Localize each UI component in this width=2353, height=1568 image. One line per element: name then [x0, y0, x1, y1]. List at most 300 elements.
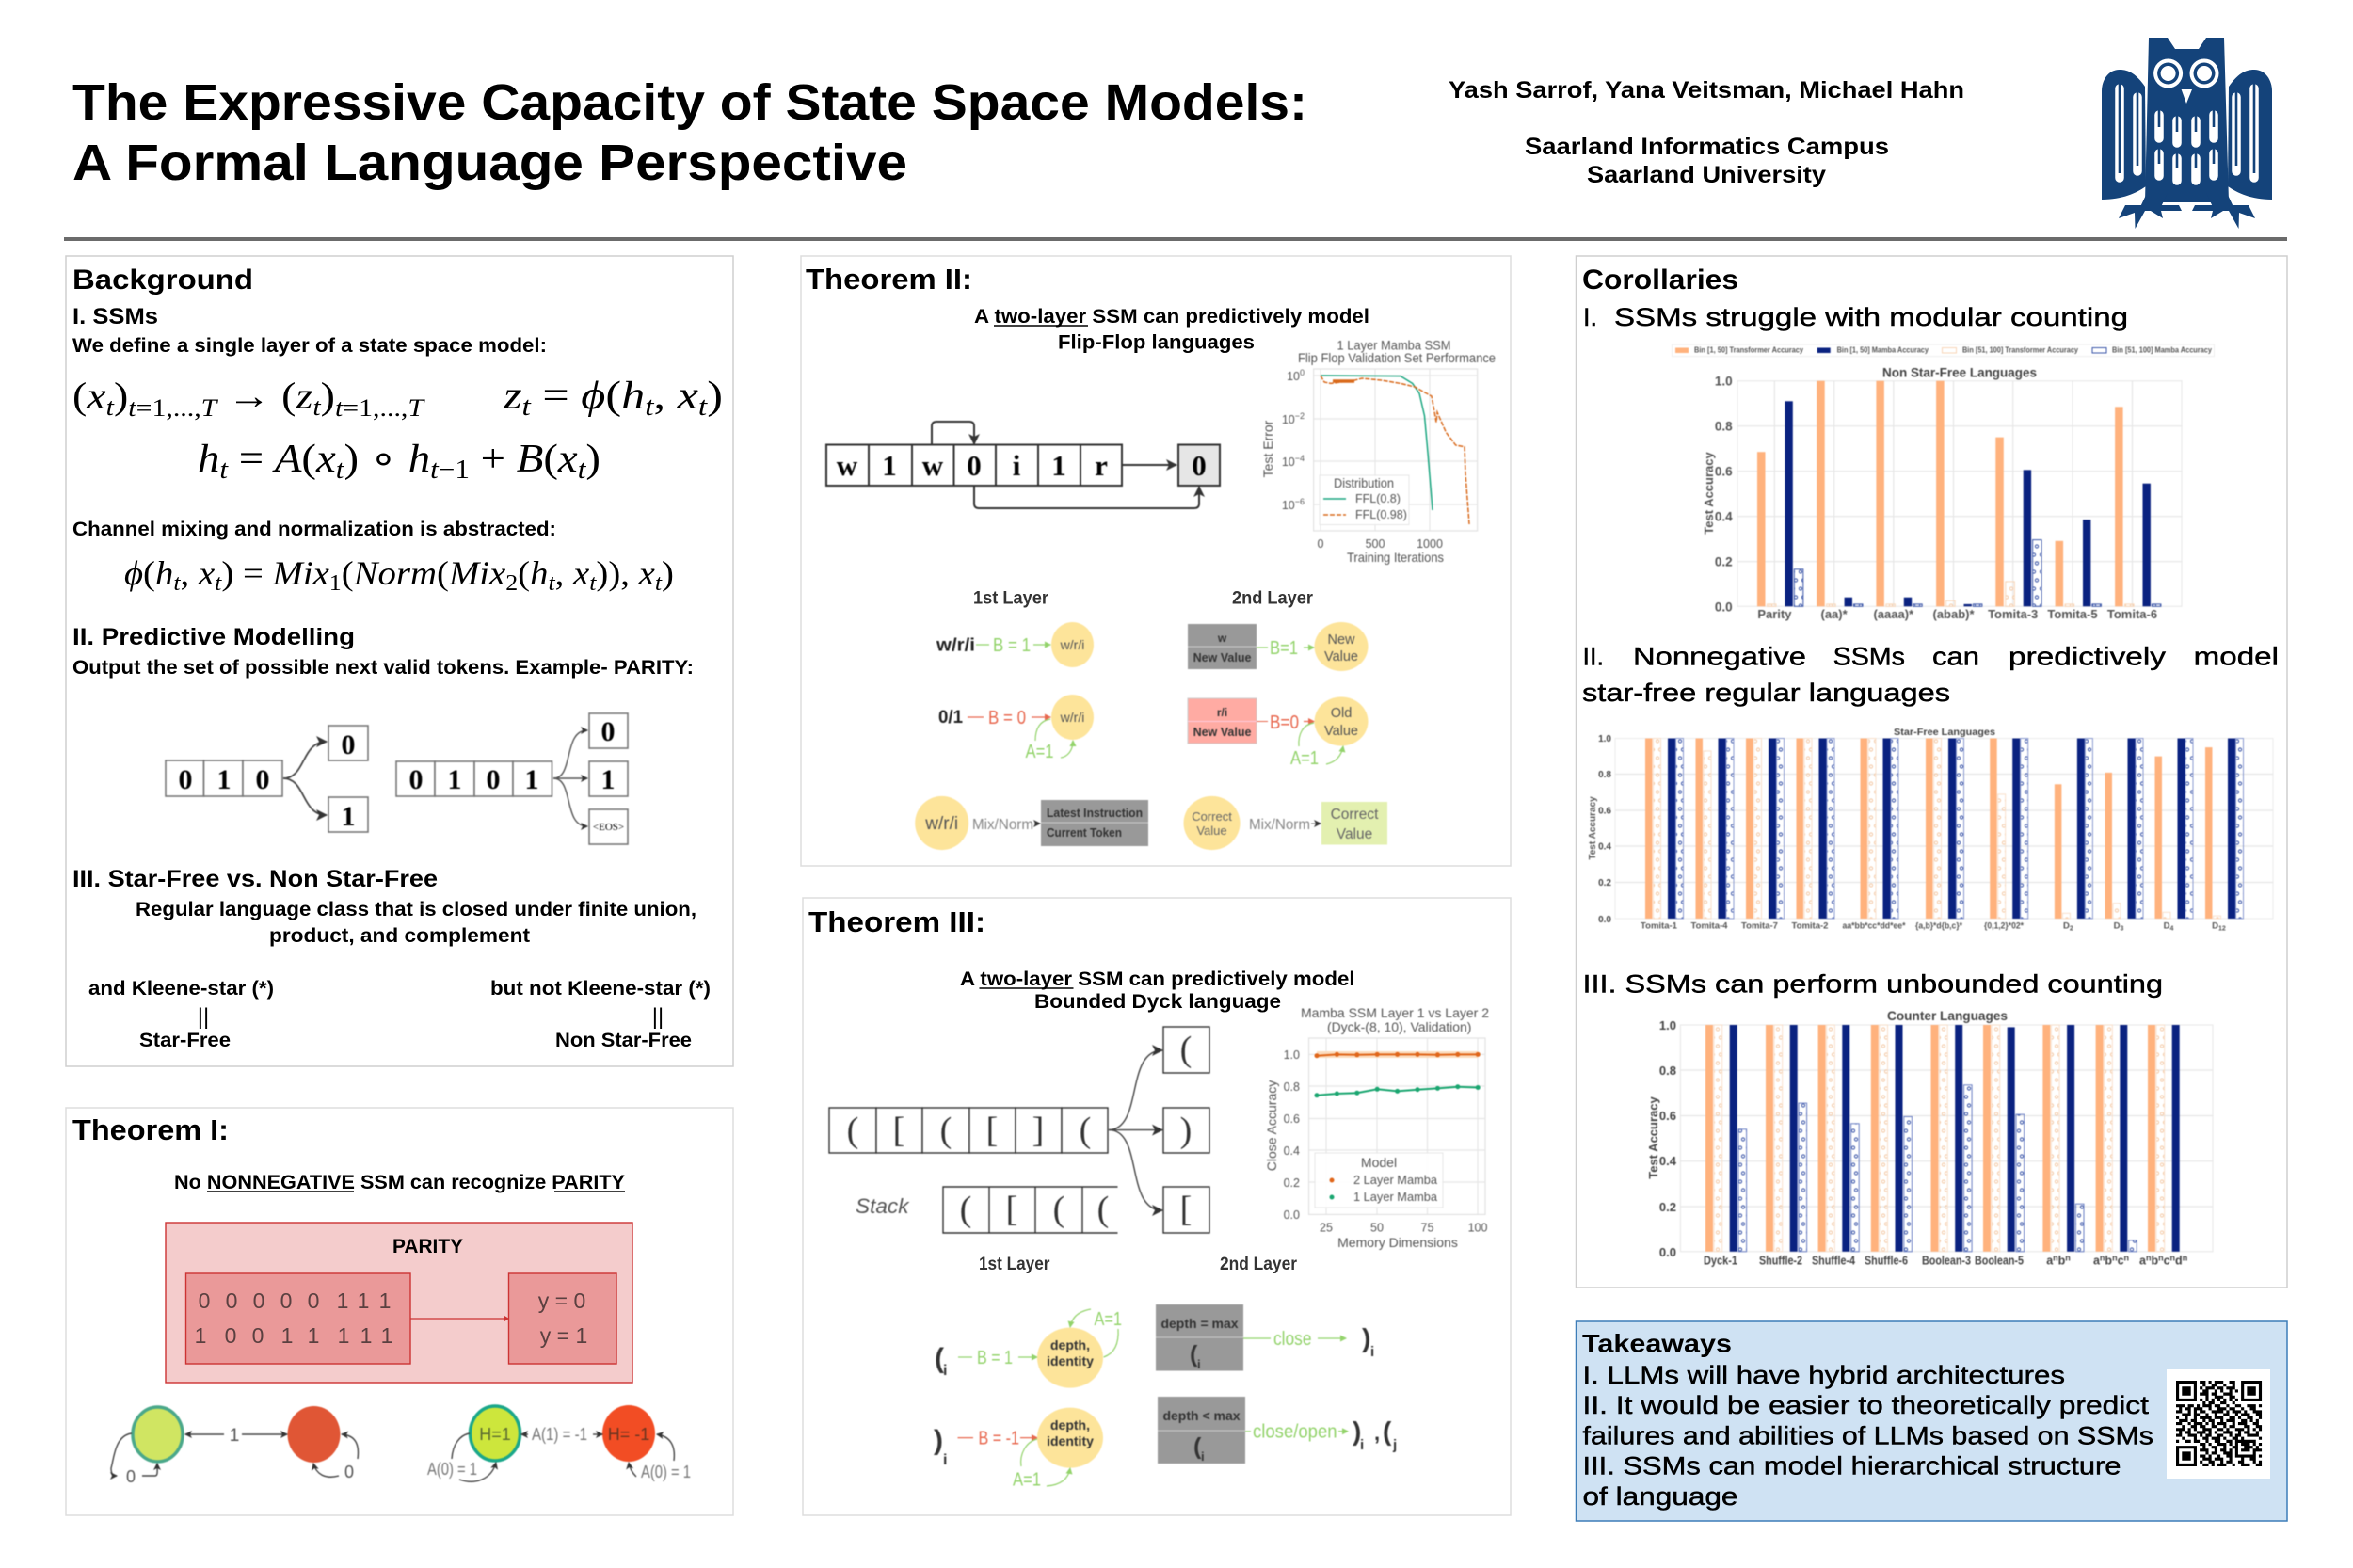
diagram: first layer hold path: w/r/i [1060, 710, 1084, 725]
equation: sequence mapping: t [128, 394, 136, 422]
text: theorem III statement [960, 968, 1355, 1013]
diagram: second layer old value: Old [1331, 706, 1352, 721]
diagram: first layer write path: B = 1 [993, 635, 1031, 656]
authors and affiliation [1449, 77, 1964, 188]
diagram: flip-flop sequence: 0 [1192, 449, 1207, 482]
chart: mamba layer 1 vs layer 2: 0.6 [1284, 1112, 1300, 1126]
text: theorem II statement: Flip-Flop languages [1058, 331, 1255, 354]
equation: sequence mapping: z [295, 375, 313, 417]
equation: phi: ) = [221, 554, 273, 592]
chart: flip flop validation performance: Flip Flop Validation Set Performance [1298, 351, 1496, 365]
equation: output: ϕ(h [581, 375, 641, 418]
heading: theorem II: Theorem II: [806, 263, 972, 296]
heading: 1st layer: 1st Layer [973, 589, 1049, 609]
chart: mamba layer 1 vs layer 2: Model [1361, 1155, 1397, 1170]
icon: QR code [2167, 1369, 2270, 1479]
diagram: dyck sequence and next tokens: ) [1180, 1111, 1192, 1150]
diagram: parity box: 1 [338, 1323, 349, 1348]
diagram: parity prefix 010: 1 [216, 764, 232, 795]
diagram: flip-flop sequence: w [922, 449, 944, 482]
text: non star-free definition: || [652, 1004, 664, 1030]
diagram: dyck sequence and next tokens: [ [893, 1111, 904, 1150]
chart: mamba layer 1 vs layer 2 [1264, 1005, 1489, 1250]
equation: hidden state: ) [585, 438, 600, 481]
bar chart: non star-free languages: Tomita-5 [2047, 607, 2098, 621]
equation: hidden state: t [578, 456, 587, 485]
equation: phi: x [198, 554, 215, 592]
diagram: second layer output: Correct [1192, 809, 1232, 824]
chart: mamba layer 1 vs layer 2: 0.4 [1284, 1144, 1300, 1158]
bar chart: non star-free languages: (abab)* [1932, 607, 1975, 621]
diagram: dyck sequence and next tokens [829, 1027, 1209, 1233]
bar chart: non star-free languages: Tomita-6 [2107, 607, 2157, 621]
diagram: parity prefix 010: 0 [256, 764, 269, 795]
text: theorem II statement: A two-layer SSM can predictively model [974, 305, 1369, 328]
diagram: second layer new value: New [1327, 632, 1355, 648]
bar chart: non star-free languages: Non Star-Free Languages [1882, 365, 2037, 380]
bar chart: star-free languages: Test Accuracy [1588, 796, 1598, 860]
heading: theorem I: Theorem I: [72, 1113, 229, 1146]
chart: mamba layer 1 vs layer 2: 0.2 [1284, 1176, 1300, 1190]
bar chart: star-free languages: 0.6 [1598, 806, 1611, 817]
bar chart: counter languages: Boolean-5 [1975, 1254, 2024, 1267]
equation: output: ) [707, 375, 723, 418]
equation: phi: t [215, 571, 223, 596]
diagram: dyck sequence and next tokens: ] [1032, 1111, 1044, 1150]
diagram: dyck sequence and next tokens: ( [847, 1111, 858, 1150]
chart: mamba layer 1 vs layer 2: Memory Dimensions [1337, 1235, 1458, 1250]
diagram: parity prefix 0101: 0 [408, 764, 424, 795]
text: takeaway list: of language [1583, 1482, 1737, 1511]
diagram: depth below max: ( [1383, 1416, 1392, 1446]
chart: mamba layer 1 vs layer 2: 2 Layer Mamba [1353, 1173, 1438, 1187]
chart: flip flop validation performance: 10 [1282, 456, 1295, 469]
diagram: stack: [ [1006, 1190, 1017, 1229]
heading: 1st layer: 1st Layer [979, 1255, 1050, 1274]
bar chart: counter languages: Shuffle-2 [1759, 1254, 1802, 1267]
equation: hidden state: A(x [275, 438, 334, 481]
diagram: flip-flop sequence: 1 [882, 449, 897, 482]
bar chart: counter languages: b [2151, 1254, 2158, 1267]
equation: phi: )), [596, 554, 639, 592]
diagram: second layer output: Value [1196, 824, 1227, 838]
diagram: stack: ( [960, 1190, 971, 1229]
diagram: parity prefix 010: 0 [179, 764, 192, 795]
diagram: first layer hold path: B = 0 [988, 708, 1026, 728]
title [72, 74, 1307, 191]
bar chart: counter languages: n [2146, 1254, 2151, 1263]
bar chart: star-free languages: 12 [2218, 926, 2226, 932]
diagram: depth below max: ( [1193, 1433, 1202, 1460]
diagram: open bracket first layer [935, 1309, 1122, 1388]
diagram: parity box: 0 [253, 1288, 264, 1313]
bar chart: counter languages: 0.2 [1659, 1200, 1676, 1214]
equation: output: t [698, 392, 709, 422]
text: theorem I statement: No NONNEGATIVE SSM can recognize PARITY [174, 1172, 625, 1193]
diagram: parity box: 1 [379, 1288, 391, 1313]
panel: takeaways [1576, 1321, 2287, 1521]
chart legend: bins: Bin [1, 50] Transformer Accuracy [1694, 344, 1803, 354]
diagram: depth equals max: close [1273, 1329, 1312, 1350]
equation: phi: Norm(Mix [354, 554, 502, 592]
equation: sequence mapping: =1,..., T [343, 394, 422, 422]
bar chart: star-free languages: 4 [2169, 926, 2173, 932]
diagram: close bracket first layer: i [943, 1452, 947, 1468]
chart legend: bins: Bin [1, 50] Mamba Accuracy [1837, 344, 1929, 354]
equation: hidden state: h [408, 438, 430, 481]
diagram: second layer output: Mix/Norm [1249, 817, 1310, 833]
subheading: star-free regular languages: SSMs [1833, 643, 1905, 671]
text: regular language class: product, and complement [269, 925, 530, 947]
bar chart: counter languages: Shuffle-6 [1865, 1254, 1908, 1267]
subheading: star-free regular languages [1582, 643, 2279, 707]
panel: corollaries [1576, 256, 2287, 1288]
chart: flip flop validation performance: FFL(0.8) [1355, 492, 1401, 505]
equation: sequence mapping: t [312, 393, 322, 421]
diagram: two-state parity automaton: 0 [126, 1467, 136, 1486]
bar chart: star-free languages: D [2063, 920, 2070, 932]
diagram: depth equals max: ) [1362, 1323, 1370, 1352]
equation: output: = [531, 375, 581, 418]
panel: theorem III [803, 898, 1511, 1515]
diagram: depth equals max: i [1197, 1357, 1201, 1371]
bar chart: counter languages: Counter Languages [1887, 1009, 2008, 1023]
chart: flip flop validation performance: 500 [1366, 537, 1385, 551]
diagram: stack: ( [1097, 1190, 1109, 1229]
diagram: nonpositive SSM automaton: A(0) = 1 [641, 1463, 691, 1481]
bar chart: star-free languages: 0.2 [1598, 878, 1611, 888]
diagram: close bracket first layer: identity [1047, 1433, 1094, 1448]
bar chart: counter languages: a [2046, 1254, 2053, 1267]
diagram: flip-flop sequence: w [837, 449, 858, 482]
text: takeaway list: II. It would be easier to theoretically predict [1583, 1391, 2150, 1419]
bar chart: counter languages: c [2118, 1254, 2124, 1267]
text: star-free definition: and Kleene-star (*) [88, 978, 274, 1000]
equation: hidden state: = [228, 438, 275, 481]
subheading: SSMs: I. SSMs [72, 304, 158, 329]
diagram: stack: Stack [856, 1194, 910, 1218]
equation: phi: , [181, 554, 199, 592]
diagram: parity box: 1 [281, 1323, 293, 1348]
diagram: parity prefix 010: 0 [341, 729, 356, 760]
text: theorem III statement: Bounded Dyck language [1034, 990, 1281, 1013]
diagram: flip-flop sequence [826, 422, 1220, 508]
diagram: first layer output [915, 796, 1148, 850]
subheading: predictive modelling: II. Predictive Modelling [72, 624, 355, 650]
chart: flip flop validation performance: −6 [1295, 497, 1305, 506]
authors and affiliation: Saarland Informatics Campus [1525, 134, 1889, 160]
equation: hidden state: + [470, 438, 517, 481]
bar chart: star-free languages: 1.0 [1598, 734, 1611, 744]
bar chart: star-free languages: 0.0 [1598, 915, 1611, 925]
bar chart: counter languages: n [2065, 1254, 2071, 1263]
diagram: parity prefix 0101: <EOS> [593, 822, 624, 833]
bar chart: counter languages: 0.4 [1659, 1154, 1677, 1168]
chart legend: bins: Bin [51, 100] Transformer Accuracy [1962, 344, 2078, 354]
bar chart: star-free languages: Tomita-1 [1641, 920, 1678, 932]
equation: hidden state: −1 [439, 456, 470, 485]
diagram: parity box: 0 [226, 1288, 237, 1313]
diagram: first layer hold path: 0/1 [938, 708, 963, 728]
chart: mamba layer 1 vs layer 2: 75 [1421, 1222, 1433, 1235]
diagram: second layer new value: New Value [1193, 651, 1251, 664]
subheading: star-free regular languages: star-free regular languages [1582, 679, 1950, 707]
bar chart: counter languages: n [2183, 1254, 2187, 1263]
equation: sequence mapping: T [201, 394, 218, 422]
diagram: second layer output [1184, 796, 1387, 850]
text: star-free definition: || [198, 1004, 209, 1030]
diagram: second layer new value: B=1 [1270, 638, 1298, 659]
diagram: first layer hold path: A=1 [1026, 742, 1054, 762]
equation: output: x [676, 375, 698, 418]
bar chart: counter languages: n [2100, 1254, 2105, 1263]
equation: sequence mapping: → ( [216, 375, 296, 417]
equation: phi: , [555, 554, 573, 592]
panel: theorem I [66, 1108, 733, 1515]
bar chart: star-free languages: D [2114, 920, 2120, 932]
chart: mamba layer 1 vs layer 2: 50 [1370, 1222, 1384, 1235]
heading: background: Background [72, 264, 253, 296]
text: channel mixing: Channel mixing and normalization is abstracted: [72, 519, 556, 540]
diagram: open bracket first layer: depth, [1050, 1337, 1090, 1352]
diagram: nonpositive SSM automaton: A(0) = 1 [427, 1460, 477, 1479]
bar chart: counter languages: Test Accuracy [1646, 1096, 1660, 1179]
diagram: second layer output: Correct [1331, 807, 1379, 823]
subheading: star-free regular languages: predictively [2009, 643, 2167, 671]
diagram: parity box: 1 [195, 1323, 206, 1348]
bar chart: non star-free languages: 0.8 [1715, 420, 1733, 434]
diagram: nonpositive SSM automaton: A(1) = -1 [532, 1425, 587, 1444]
bar chart: star-free languages: 2 [2070, 926, 2073, 932]
bar chart: non star-free languages: 0.6 [1715, 465, 1733, 479]
chart: mamba layer 1 vs layer 2: 100 [1468, 1222, 1487, 1235]
bar chart: non star-free languages: 1.0 [1715, 375, 1733, 389]
text: non star-free definition [490, 978, 711, 1051]
diagram: depth equals max: i [1370, 1344, 1374, 1360]
chart: mamba layer 1 vs layer 2: 25 [1320, 1222, 1333, 1235]
bar chart: star-free languages: Tomita-7 [1741, 920, 1778, 932]
diagram: second layer old value: r/i [1217, 706, 1227, 719]
bar chart: counter languages: 0.8 [1659, 1064, 1676, 1078]
bar chart: counter languages: n [2124, 1254, 2129, 1263]
diagram: parity box: 1 [381, 1323, 392, 1348]
diagram: depth below max: close/open [1253, 1422, 1337, 1443]
diagram: first layer write path: w/r/i [1060, 637, 1084, 652]
diagram: second layer new value: Value [1324, 649, 1358, 664]
title: The Expressive Capacity of State Space Models: [72, 74, 1307, 131]
text: theorem II statement [974, 305, 1369, 354]
subheading: star-free: III. Star-Free vs. Non Star-Free [72, 866, 438, 892]
diagram: first layer write path [936, 622, 1094, 667]
text: takeaway list [1583, 1361, 2153, 1511]
chart: flip flop validation performance: 10 [1282, 413, 1295, 426]
text: takeaway list: III. SSMs can model hierarchical structure [1583, 1452, 2121, 1480]
diagram: parity box: y = 0 [538, 1288, 585, 1313]
diagram: parity box: 1 [337, 1288, 348, 1313]
diagram: flip-flop sequence: 1 [1051, 449, 1066, 482]
diagram: parity prefix 0101: 0 [486, 764, 501, 795]
text: star-free definition: Star-Free [139, 1030, 231, 1051]
diagram: first layer output: Mix/Norm [972, 817, 1033, 833]
chart: flip flop validation performance: 0 [1300, 368, 1305, 377]
equation: phi: Mix [271, 554, 329, 592]
diagram: second layer output: Value [1337, 826, 1372, 842]
bar chart: counter languages: n [2112, 1254, 2118, 1263]
equation: phi: ϕ(h [124, 554, 172, 592]
bar chart: counter languages: c [2164, 1254, 2170, 1267]
bar chart: star-free languages: {0,1,2}*02* [1984, 920, 2024, 930]
diagram: nonpositive SSM automaton: H=1 [479, 1425, 511, 1444]
panel: background [66, 256, 733, 1066]
equation: phi: ) [662, 554, 674, 592]
diagram: dyck sequence and next tokens: ( [1180, 1030, 1192, 1069]
chart: mamba layer 1 vs layer 2: Mamba SSM Layer 1 vs Layer 2 [1301, 1005, 1489, 1020]
authors and affiliation: Saarland University [1587, 162, 1826, 188]
bar chart: star-free languages: 3 [2120, 926, 2123, 932]
diagram: open bracket first layer: i [943, 1363, 947, 1379]
diagram: parity box: 0 [280, 1288, 292, 1313]
bar chart: star-free languages: {a,b}*d{b,c}* [1915, 920, 1962, 930]
equation: hidden state: B(x [517, 438, 576, 481]
diagram: dyck sequence and next tokens: [ [986, 1111, 998, 1150]
chart: flip flop validation performance: 10 [1282, 499, 1295, 512]
subheading: star-free regular languages: Nonnegative [1633, 643, 1806, 671]
text: star-free definition [88, 978, 274, 1051]
equation: phi: 1 [329, 571, 342, 596]
equation: hidden state: t [219, 456, 229, 485]
heading: theorem III: Theorem III: [808, 905, 985, 938]
bar chart: star-free languages: Tomita-2 [1792, 920, 1828, 932]
chart: mamba layer 1 vs layer 2: Close Accuracy [1264, 1080, 1279, 1171]
diagram: second layer new value [1188, 622, 1369, 671]
diagram: flip-flop sequence: i [1013, 449, 1021, 482]
heading: takeaways: Takeaways [1582, 1330, 1732, 1358]
chart: flip flop validation performance: 1000 [1417, 537, 1443, 551]
bar chart: non star-free languages: 0.0 [1715, 600, 1733, 614]
equation: output: t [645, 392, 655, 422]
subheading: modular counting: I. [1583, 303, 1597, 331]
diagram: parity prefix 010: 1 [341, 801, 356, 832]
diagram: parity prefix 0101: 0 [600, 716, 616, 747]
diagram: parity box: 0 [225, 1323, 236, 1348]
diagram: parity box: 0 [252, 1323, 264, 1348]
diagram: first layer hold path [938, 695, 1094, 762]
diagram: parity box: PARITY [392, 1236, 463, 1257]
bar chart: star-free languages: aa*bb*cc*dd*ee* [1843, 920, 1906, 930]
diagram: depth below max [1158, 1397, 1397, 1464]
diagram: depth below max: i [1360, 1437, 1364, 1453]
text: non star-free definition: Non Star-Free [555, 1030, 692, 1051]
diagram: depth below max: ) [1353, 1416, 1361, 1446]
bar chart: non star-free languages: (aaaa)* [1873, 607, 1914, 621]
chart: flip flop validation performance: Distribution [1334, 476, 1394, 490]
text: non star-free definition: but not Kleene-star (*) [490, 978, 711, 1000]
diagram: parity box: 0 [308, 1288, 319, 1313]
diagram: parity box: 1 [308, 1323, 319, 1348]
chart: flip flop validation performance: −2 [1295, 411, 1305, 421]
equation: phi: t [173, 571, 182, 596]
equation: phi: t [589, 571, 598, 596]
diagram: close bracket first layer: depth, [1050, 1417, 1090, 1432]
chart: flip flop validation performance: FFL(0.98) [1355, 508, 1407, 521]
diagram: depth below max: depth < max [1162, 1408, 1241, 1423]
equation: phi: ( [518, 554, 530, 592]
chart: flip flop validation performance: −4 [1295, 454, 1305, 463]
equation: phi: t [655, 571, 664, 596]
diagram: parity box: y = 1 [540, 1323, 587, 1348]
heading: corollaries: Corollaries [1582, 264, 1738, 296]
diagram: nonpositive SSM automaton: H= -1 [608, 1425, 649, 1444]
text: theorem III statement: A two-layer SSM can predictively model [960, 968, 1355, 990]
diagram: parity prefix 0101: 1 [600, 764, 616, 795]
chart legend: bins: Bin [51, 100] Mamba Accuracy [2112, 344, 2212, 354]
diagram: depth equals max: depth = max [1160, 1316, 1239, 1331]
bar chart: counter languages: Dyck-1 [1704, 1254, 1737, 1267]
equation: hidden state: t [430, 456, 440, 485]
equation: output: z [503, 375, 522, 418]
diagram: open bracket first layer: B = 1 [977, 1348, 1013, 1368]
equation: sequence mapping: (x [72, 375, 104, 417]
title: A Formal Language Perspective [72, 135, 907, 191]
diagram: dyck sequence and next tokens: ( [940, 1111, 952, 1150]
bar chart: counter languages: Boolean-3 [1922, 1254, 1971, 1267]
bar chart: counter languages: b [2105, 1254, 2112, 1267]
diagram: first layer output: w/r/i [924, 814, 958, 834]
chart: mamba layer 1 vs layer 2: 1 Layer Mamba [1353, 1190, 1438, 1204]
chart: flip flop validation performance: 0 [1318, 537, 1324, 551]
subheading: unbounded counting: III. SSMs can perform unbounded counting [1583, 970, 2163, 999]
diagram: open bracket first layer: A=1 [1094, 1309, 1122, 1330]
bar chart: counter languages [1646, 1009, 2213, 1267]
equation: sequence mapping: =1,..., [136, 394, 201, 422]
chart: flip flop validation performance: 10 [1287, 370, 1300, 383]
diagram: stack: ( [1053, 1190, 1064, 1229]
subheading: modular counting: SSMs struggle with modular counting [1614, 303, 2128, 331]
diagram: close bracket first layer [934, 1408, 1103, 1490]
diagram: dyck sequence and next tokens: [ [1180, 1190, 1192, 1229]
equation: phi: t [548, 571, 556, 596]
equation: hidden state: h [198, 438, 219, 481]
heading: 2nd layer: 2nd Layer [1220, 1255, 1298, 1274]
diagram: flip-flop sequence: r [1095, 449, 1108, 482]
heading: 2nd layer: 2nd Layer [1232, 589, 1314, 609]
authors and affiliation: Yash Sarrof, Yana Veitsman, Michael Hahn [1449, 77, 1964, 104]
equation: phi: 2 [505, 571, 518, 596]
text: takeaway list: failures and abilities of LLMs based on SSMs [1583, 1422, 2153, 1450]
chart: flip flop validation performance: Training Iterations [1347, 550, 1444, 565]
diagram: second layer old value [1188, 696, 1369, 769]
diagram: parity box: 1 [358, 1288, 369, 1313]
bar chart: counter languages: n [2170, 1254, 2175, 1263]
equation: phi: x [572, 554, 589, 592]
bar chart: counter languages: d [2175, 1254, 2183, 1267]
bar chart: counter languages: n [2158, 1254, 2164, 1263]
diagram: parity prefix 010 [166, 726, 368, 832]
equation: hidden state: t [336, 456, 345, 485]
diagram: depth below max: , [1374, 1421, 1380, 1445]
bar chart: non star-free languages: 0.4 [1715, 510, 1733, 524]
diagram: nonpositive SSM automaton [427, 1405, 691, 1481]
diagram: dyck sequence and next tokens: ( [1080, 1111, 1091, 1150]
bar chart: counter languages: a [2093, 1254, 2100, 1267]
equation: phi: ( [342, 554, 354, 592]
diagram: depth below max: j [1392, 1437, 1397, 1453]
diagram: second layer new value: w [1217, 632, 1227, 645]
equation: output: t [522, 392, 532, 422]
diagram: stack [856, 1187, 1118, 1233]
diagram: first layer output: Current Token [1047, 826, 1122, 840]
chart: mamba layer 1 vs layer 2: 1.0 [1284, 1048, 1300, 1062]
